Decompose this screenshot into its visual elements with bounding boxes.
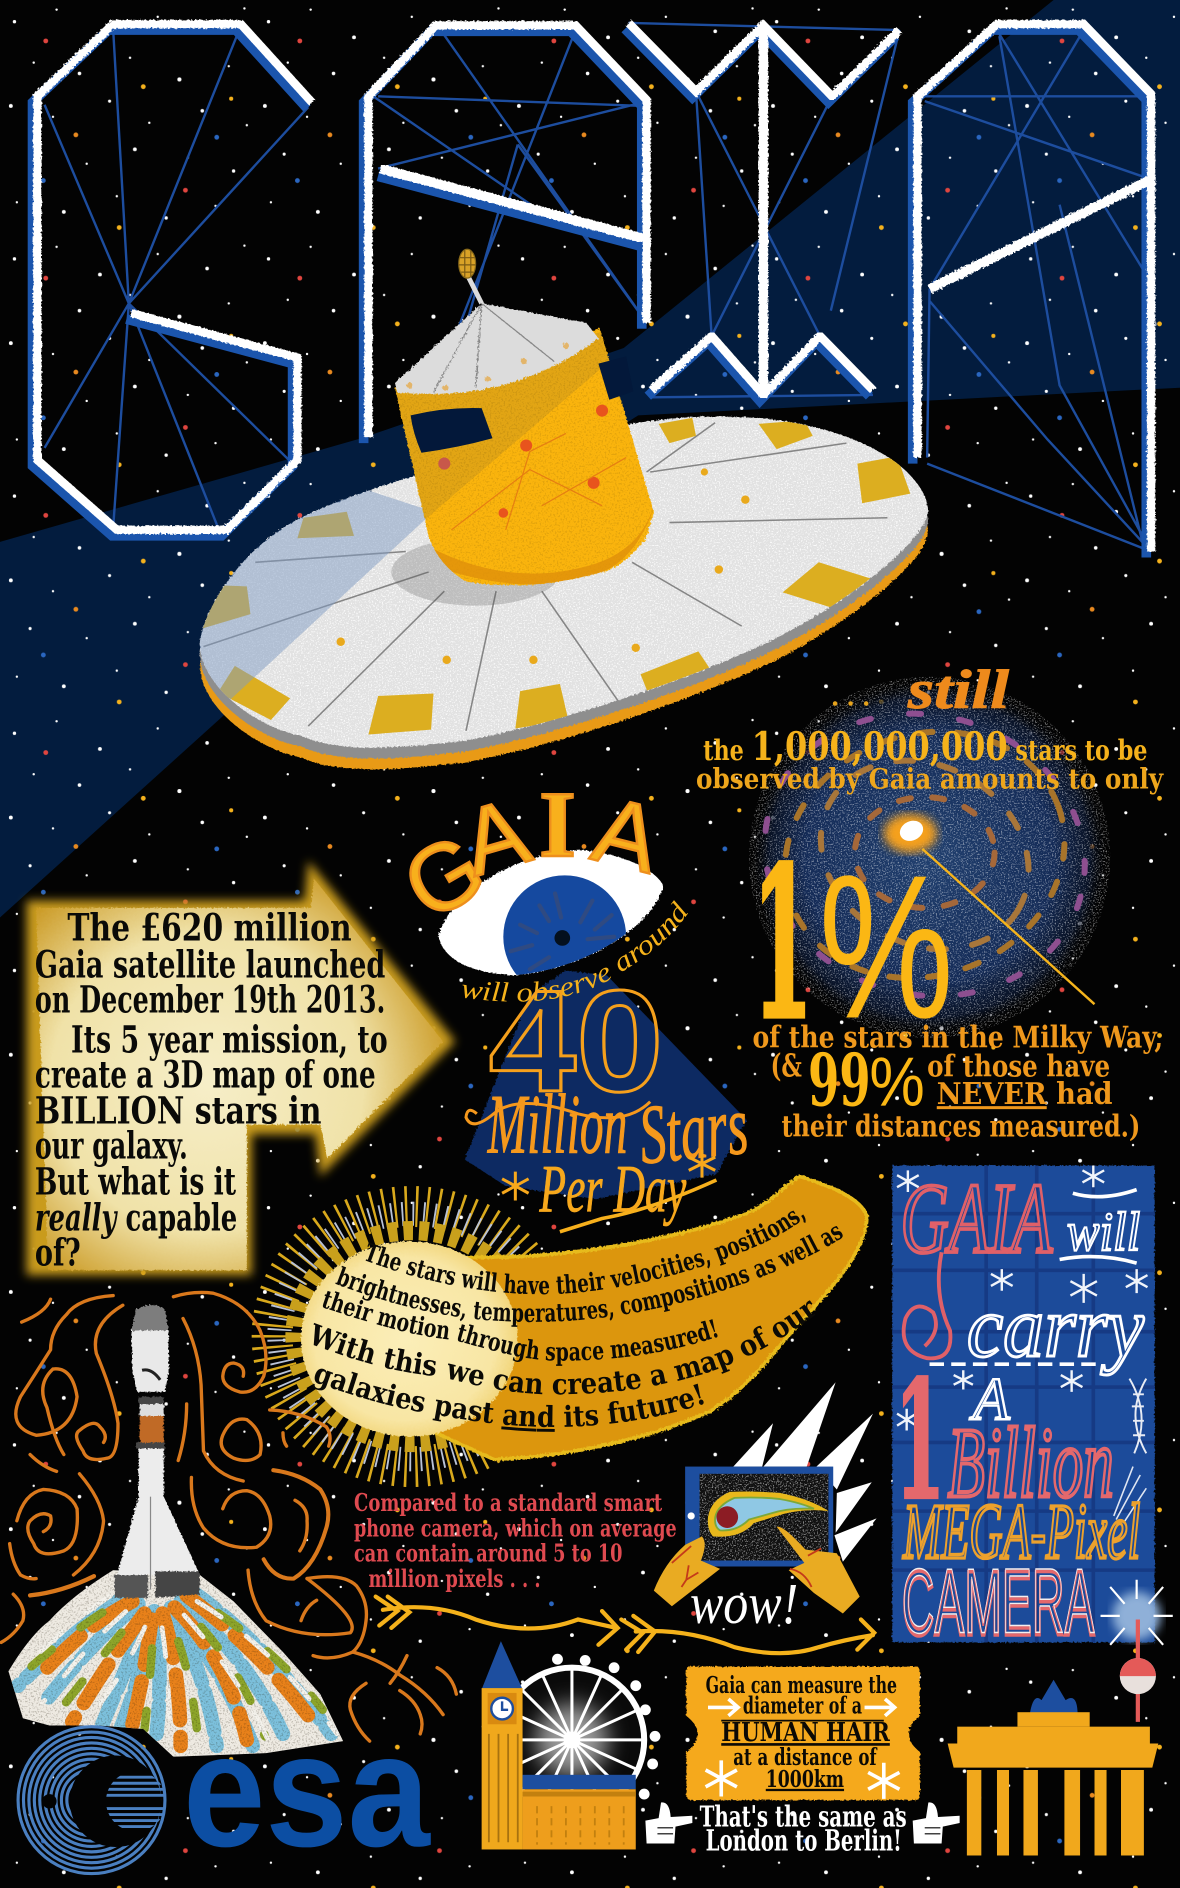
illustration: Gaia satellite	[120, 249, 951, 783]
illustration: light cone	[465, 970, 747, 1199]
ticket text: 1000km	[766, 1767, 844, 1793]
text: one billion stars	[696, 724, 1164, 796]
camera panel background	[892, 1166, 1155, 1642]
ribbon large text: galaxies past and its future!	[313, 1368, 704, 1432]
Big Ben tower	[482, 1688, 523, 1849]
disc texture, spokes and patches	[200, 416, 928, 748]
text: GAIA arc: G	[386, 813, 502, 940]
text: compared to a smart phone camera: phone camera, which on average	[354, 1513, 677, 1542]
text: GAIA arc: I	[539, 773, 576, 877]
swash under Per Day	[560, 1180, 716, 1232]
text: 40: 40	[489, 960, 663, 1122]
tablet screen	[700, 1474, 828, 1560]
text: GAIA: GAIA	[901, 1162, 1053, 1274]
icon: DNA	[1129, 1379, 1146, 1453]
arrow body text: BILLION stars in	[35, 1088, 321, 1132]
text: carry: carry	[967, 1279, 1144, 1375]
text: London to Berlin	[700, 1800, 907, 1858]
text: GAIA arc	[386, 773, 670, 940]
ticket text	[706, 1673, 897, 1793]
Brandenburg Gate	[948, 1712, 1158, 1855]
panel: billion pixel camera	[892, 1162, 1155, 1655]
decorative swash	[466, 1102, 650, 1124]
rocket markings	[142, 1370, 160, 1589]
text: of the stars in the Milky Way	[753, 1021, 1163, 1145]
text: compared to a smart phone camera: Compared to a standard smart	[354, 1488, 662, 1517]
ticket text: diameter of a	[743, 1693, 862, 1719]
rocket flames	[0, 1565, 349, 1764]
Quadriga	[1029, 1680, 1078, 1716]
letter A	[364, 25, 647, 443]
text: GAIA arc: A	[451, 778, 540, 896]
panel: billion pixel camera: 1	[895, 1344, 945, 1537]
diagonal blue light band	[0, 0, 1180, 918]
arrow body text: our galaxy.	[35, 1123, 188, 1167]
arrow: to camera panel	[621, 1616, 874, 1653]
text: wow: wow!	[690, 1572, 798, 1636]
esa wordmark: esa	[183, 1701, 431, 1881]
letter A (second)	[913, 24, 1151, 557]
letter G	[33, 24, 312, 536]
ticket stars	[706, 1760, 899, 1799]
rocket body	[114, 1305, 200, 1598]
text: London to Berlin: London to Berlin!	[706, 1824, 902, 1858]
illustration: Gaia eye	[438, 850, 664, 976]
ticket shape	[686, 1666, 920, 1800]
satellite sunshield disc	[200, 416, 928, 769]
text: will observe around: will observe around	[462, 900, 688, 1002]
arrow body text: But what is it	[35, 1159, 237, 1203]
letter I	[625, 23, 899, 401]
illustration: rocket launch	[0, 1305, 349, 1764]
ribbon large text	[313, 1300, 812, 1432]
big number: 1%: 1	[753, 822, 813, 1065]
G descender curl	[904, 1252, 950, 1358]
burst rays	[272, 1206, 551, 1467]
hatch marks	[1114, 1467, 1146, 1523]
ticket text: at a distance of	[733, 1745, 878, 1771]
big number: 1%: %	[819, 833, 954, 1061]
arrow body text: Its 5 year mission, to	[71, 1017, 388, 1061]
cylinder shading and detail	[395, 328, 653, 586]
esa roundel	[18, 1727, 169, 1874]
text: CAMERA	[902, 1551, 1095, 1655]
arrow body text: The £620 million	[67, 905, 352, 949]
illustration: Berlin skyline	[948, 1580, 1173, 1855]
galaxy illustration	[733, 677, 1117, 1038]
arrow: to tablet	[376, 1597, 618, 1645]
arrow shape	[26, 861, 455, 1275]
text: compared to a smart phone camera: million pixels . . .	[368, 1564, 541, 1593]
arrow panel: mission description	[26, 861, 455, 1275]
burst pale centre	[301, 1241, 518, 1436]
icon: left hand	[654, 1536, 720, 1606]
ribbon small text: brightnesses, temperatures, compositions as well as	[335, 1226, 843, 1327]
text: Stars: Stars	[635, 1079, 752, 1183]
ticket arrows	[708, 1699, 895, 1716]
antenna	[459, 249, 482, 303]
tablet button	[688, 1512, 695, 1520]
title: GAIA constellation letters	[33, 23, 1151, 557]
ribbon shape	[409, 1176, 867, 1459]
ribbon large text: With this we can create a map of our	[314, 1300, 812, 1395]
arrow body text	[35, 905, 388, 1274]
text: one billion stars: the 1,000,000,000 stars to be	[703, 724, 1147, 770]
asterisks	[502, 1150, 715, 1200]
snowflake stars	[897, 1166, 1147, 1430]
will swashes	[1060, 1190, 1137, 1263]
text: A: A	[969, 1367, 1010, 1434]
arrow body text: on December 19th 2013.	[35, 978, 385, 1022]
text: still: still	[907, 659, 1010, 720]
Parliament	[523, 1775, 636, 1849]
ribbon small text: The stars will have their velocities, positions,	[366, 1210, 806, 1294]
text: of the stars in the Milky Way: of those have	[927, 1049, 1110, 1084]
arrow body text: Gaia satellite launched	[35, 943, 385, 987]
ticket text: HUMAN HAIR	[721, 1717, 891, 1748]
text: dots: ...	[831, 683, 878, 712]
text: Per Day: Per Day	[539, 1151, 686, 1226]
illustration: London skyline	[482, 1641, 660, 1849]
icon: right hand	[777, 1527, 860, 1613]
satellite cone top	[395, 303, 598, 394]
illustration: tablet with comet	[654, 1382, 877, 1636]
starburst ribbon: measurements	[252, 1174, 870, 1487]
text: of the stars in the Milky Way: (&	[771, 1048, 802, 1084]
tablet frame	[685, 1467, 833, 1567]
arrow body text: create a 3D map of one	[35, 1052, 376, 1096]
logo: esa	[16, 1725, 431, 1876]
icon: pointing hand right	[913, 1802, 960, 1843]
ribbon small text: their motion through space measured!	[322, 1290, 718, 1366]
callout: human hair ticket	[686, 1666, 920, 1800]
text: London to Berlin: That's the same as	[700, 1800, 907, 1834]
arrow body text: of?	[35, 1230, 81, 1274]
big number: 99%: 99	[808, 1038, 871, 1123]
text: will: will	[1067, 1201, 1140, 1262]
text: Million: Million	[487, 1078, 627, 1171]
arrow body text: really capable	[35, 1196, 237, 1240]
icon: pointing hand left	[645, 1802, 692, 1843]
text: of the stars in the Milky Way: NEVER had	[937, 1077, 1113, 1112]
satellite cylinder body	[395, 328, 654, 585]
London Eye	[500, 1654, 660, 1812]
dashed divider	[930, 1363, 1102, 1366]
illustration: decorative swirls around rocket	[1, 1292, 456, 1741]
Big Ben spire	[482, 1641, 523, 1689]
text: compared to a smart phone camera	[354, 1488, 677, 1593]
callout: still, one billion stars	[696, 659, 1164, 1145]
text: GAIA arc: A	[584, 776, 670, 893]
TV tower	[1101, 1580, 1173, 1722]
big number: 99%: %	[869, 1042, 925, 1120]
comet	[708, 1491, 828, 1537]
text: compared to a smart phone camera: can contain around 5 to 10	[354, 1539, 623, 1568]
white spikes	[733, 1382, 877, 1562]
ticket text: Gaia can measure the	[706, 1673, 897, 1699]
